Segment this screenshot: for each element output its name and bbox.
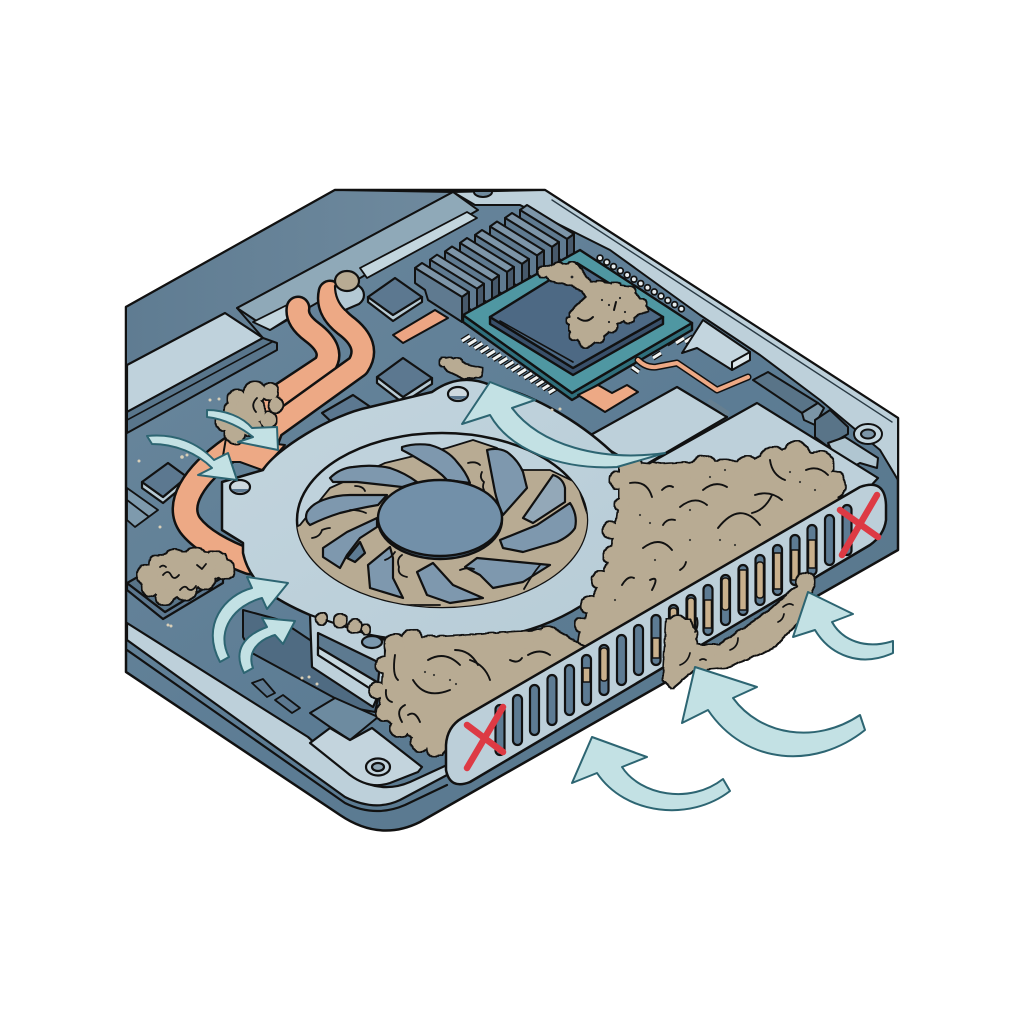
thin copper trace [638,360,748,390]
red X right [840,495,878,555]
red X left [467,707,503,768]
lower copper pad [578,385,638,412]
airflow arrow: upper left outer [147,435,237,480]
grille bar [446,485,886,784]
airflow arrow: toward CPU [462,382,665,467]
heat sink fins [415,205,574,322]
dust on CPU [538,263,648,347]
memory card slot [127,313,277,433]
grille slots [496,505,852,755]
copper pad under heatsink [393,310,448,343]
CPU package [463,250,692,400]
right side connectors [682,320,882,472]
bottom frame rail [127,623,447,811]
airflow arrow: grille right [793,592,893,659]
airflow arrow: lower left large [213,577,288,662]
airflow arrow: lower left small [239,618,295,673]
corner plate with screw [310,728,422,785]
side port frame [310,615,385,707]
dust particles on board [138,398,562,686]
ribbon connector left edge [127,488,158,527]
fan screw holes [230,387,468,494]
dust inside fan opening [297,439,587,607]
lower left dust clump [138,548,234,605]
large dust mass left [370,627,590,756]
upper left dust clump [216,382,283,443]
copper heat pipes [185,292,363,562]
fan housing [222,380,640,641]
small pads on the board [252,679,300,713]
dust speck on board [439,358,482,378]
airflow arrow: grille left [572,737,730,810]
fan blades [306,444,576,603]
dust cracks and lines in fan [312,462,540,605]
dark port recess [243,610,380,712]
top left wall [126,190,453,412]
illustration: laptop cooling system clogged with dust [124,188,900,832]
dust over port frame [317,614,370,634]
board connector [310,698,378,740]
small chips on the board [142,278,432,503]
dust spilling out of the grille [663,572,815,687]
lower left chip [127,560,223,619]
dust inside slots [583,540,816,682]
fan opening [297,433,587,607]
top right light rim [453,190,898,480]
blower fan [222,380,640,641]
heat pipe end socket [335,271,364,310]
light panels right of fan [587,387,878,520]
long connector strip [237,192,478,330]
CPU pins [462,258,693,393]
airflow arrow: upper left inner [207,410,278,450]
airflow arrow: grille centre [682,667,865,756]
device body [126,190,898,831]
fan hub [378,480,502,559]
ventilation grille [446,485,886,784]
large dust mass right [575,442,860,665]
